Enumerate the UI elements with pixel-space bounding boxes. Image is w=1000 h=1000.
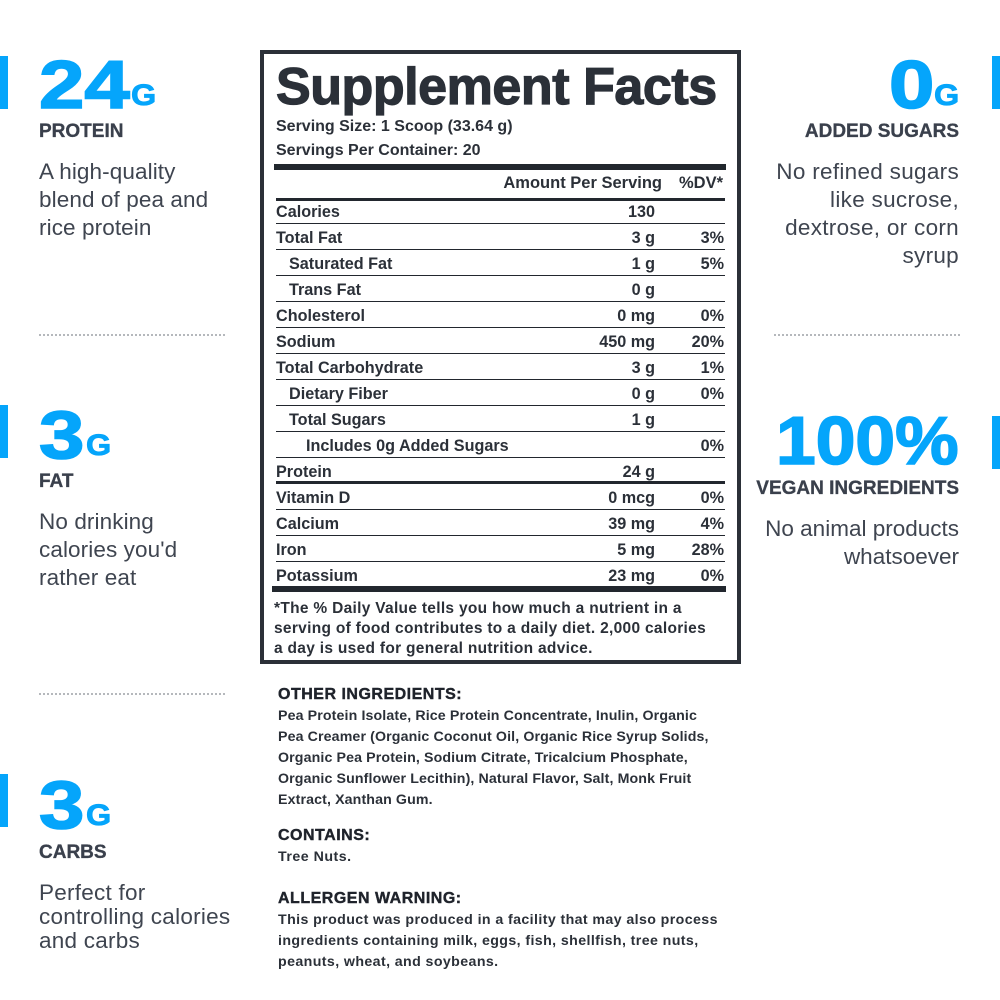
nutrition table: 0% [701, 385, 724, 403]
right stat: added sugars: No refined sugars [776, 159, 959, 184]
panel: supplement facts [260, 50, 741, 664]
serving info: Serving Size: 1 Scoop (33.64 g) [276, 118, 513, 135]
nutrition table: 3% [701, 229, 724, 247]
left stat: carbs: Perfect for [39, 880, 146, 905]
nutrition table: 0 g [632, 281, 655, 299]
nutrition table: 0 mcg [608, 489, 655, 507]
nutrition table: Cholesterol [276, 307, 365, 325]
allergen warning: peanuts, wheat, and soybeans. [278, 954, 499, 970]
right stat: added sugars [776, 46, 1000, 268]
nutrition table: 4% [701, 515, 724, 533]
contains: CONTAINS: [278, 827, 370, 844]
left stat: fat: G [86, 428, 111, 462]
left stat: carbs: 3 [39, 766, 84, 842]
footnote: a day is used for general nutrition advice. [274, 640, 593, 657]
nutrition table: 0% [701, 489, 724, 507]
nutrition table: 3 g [632, 359, 655, 377]
nutrition table: Iron [276, 541, 307, 559]
nutrition table: Dietary Fiber [289, 385, 388, 403]
other ingredients: Pea Creamer (Organic Coconut Oil, Organic Rice Syrup Solids, [278, 729, 709, 745]
nutrition table: 3 g [632, 229, 655, 247]
left stat: protein: A high-quality [39, 159, 176, 184]
left stat: carbs [0, 766, 230, 953]
left stat: protein: G [131, 78, 156, 112]
left stat: fat: FAT [39, 471, 73, 492]
left stat: protein: 24 [39, 46, 130, 122]
nutrition table: 24 g [623, 463, 655, 481]
nutrition table: 0% [701, 567, 724, 585]
nutrition table: 23 mg [608, 567, 655, 585]
left stat: carbs: CARBS [39, 842, 107, 863]
left stat: carbs: G [86, 798, 111, 832]
footnote: *The % Daily Value tells you how much a nutrient in a [274, 600, 682, 617]
left stat: protein: blend of pea and [39, 187, 208, 212]
nutrition table: Total Carbohydrate [276, 359, 423, 377]
nutrition table: Sodium [276, 333, 335, 351]
nutrition table: 0% [701, 307, 724, 325]
nutrition table: Vitamin D [276, 489, 350, 507]
right stat: added sugars: like sucrose, [830, 187, 959, 212]
right stat: vegan ingredients [756, 403, 1000, 569]
other ingredients [278, 686, 709, 808]
left stat: carbs: controlling calories [39, 904, 230, 929]
nutrition table: Protein [276, 463, 332, 481]
contains [278, 827, 370, 865]
nutrition table: Trans Fat [289, 281, 361, 299]
nutrition table: Total Fat [276, 229, 342, 247]
right stat: added sugars: ADDED SUGARS [805, 121, 959, 142]
right stat: added sugars: syrup [902, 243, 959, 268]
nutrition table: 1 g [632, 411, 655, 429]
nutrition table: 5% [701, 255, 724, 273]
nutrition table: Saturated Fat [289, 255, 392, 273]
allergen warning [278, 890, 718, 970]
left stat: protein: PROTEIN [39, 121, 123, 142]
nutrition table: 28% [692, 541, 724, 559]
left stat: protein [0, 46, 208, 240]
table header [276, 170, 725, 201]
nutrition table: Total Sugars [289, 411, 386, 429]
nutrition table [276, 203, 725, 585]
other ingredients: OTHER INGREDIENTS: [278, 686, 462, 703]
right stat: added sugars: G [934, 78, 959, 112]
right stat: vegan ingredients: No animal products [765, 516, 959, 541]
nutrition table: 1 g [632, 255, 655, 273]
left stat: protein: rice protein [39, 215, 152, 240]
nutrition table: 0 g [632, 385, 655, 403]
contains: Tree Nuts. [278, 849, 352, 865]
heading: supplement facts: Supplement Facts [276, 58, 717, 116]
nutrition table: 130 [628, 203, 655, 221]
allergen warning: ALLERGEN WARNING: [278, 890, 462, 907]
nutrition table: Includes 0g Added Sugars [306, 437, 509, 455]
table header: Amount Per Serving [503, 174, 662, 192]
other ingredients: Extract, Xanthan Gum. [278, 792, 433, 808]
right stat: added sugars: dextrose, or corn [785, 215, 959, 240]
left stat: fat: No drinking [39, 509, 154, 534]
allergen warning: This product was produced in a facility that may also process [278, 912, 718, 928]
left stat: fat [0, 396, 177, 590]
nutrition table: 39 mg [608, 515, 655, 533]
right stat: vegan ingredients: 100% [776, 403, 959, 479]
nutrition table: 0 mg [617, 307, 655, 325]
allergen warning: ingredients containing milk, eggs, fish, shellfish, tree nuts, [278, 933, 699, 949]
nutrition table: Calories [276, 203, 340, 221]
serving info: Servings Per Container: 20 [276, 142, 481, 159]
other ingredients: Organic Sunflower Lecithin), Natural Flavor, Salt, Monk Fruit [278, 771, 691, 787]
nutrition table: Calcium [276, 515, 339, 533]
nutrition table: Potassium [276, 567, 358, 585]
right stat: vegan ingredients: whatsoever [844, 544, 959, 569]
serving info [276, 118, 513, 159]
left stat: fat: rather eat [39, 565, 136, 590]
right stat: vegan ingredients: VEGAN INGREDIENTS [756, 478, 959, 499]
footnote: serving of food contributes to a daily diet. 2,000 calories [274, 620, 706, 637]
table header: %DV* [679, 174, 723, 192]
nutrition table: 450 mg [599, 333, 655, 351]
left stat: carbs: and carbs [39, 928, 140, 953]
other ingredients: Pea Protein Isolate, Rice Protein Concentrate, Inulin, Organic [278, 708, 697, 724]
left stat: fat: 3 [39, 396, 84, 472]
other ingredients: Organic Pea Protein, Sodium Citrate, Tricalcium Phosphate, [278, 750, 688, 766]
footnote [274, 600, 706, 657]
nutrition table: 1% [701, 359, 724, 377]
nutrition table: 20% [692, 333, 724, 351]
nutrition table: 5 mg [617, 541, 655, 559]
right stat: added sugars: 0 [888, 46, 934, 122]
nutrition table: 0% [701, 437, 724, 455]
left stat: fat: calories you'd [39, 537, 177, 562]
